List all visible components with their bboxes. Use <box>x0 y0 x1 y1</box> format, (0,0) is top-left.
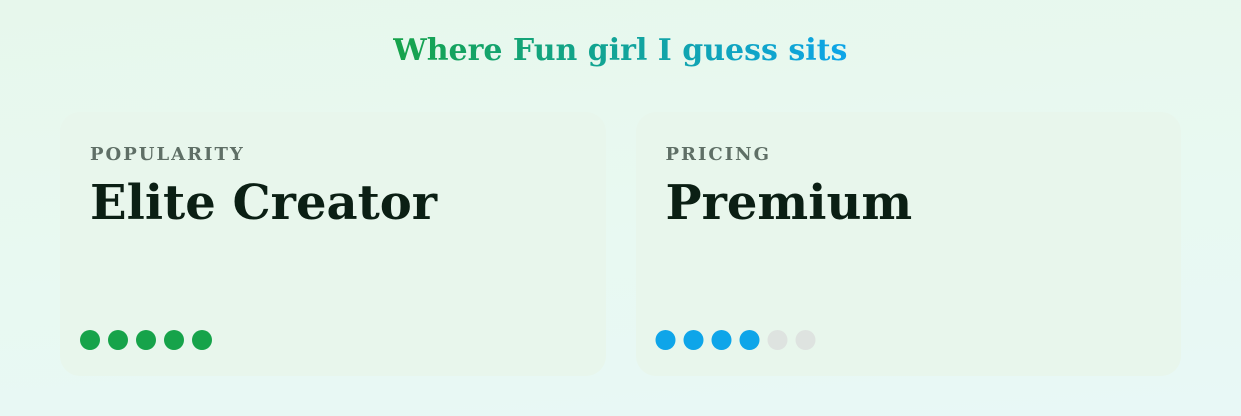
panel: pricing <box>636 112 1181 376</box>
title: Where Fun girl I guess sits <box>393 33 847 68</box>
pricing rating dots <box>656 330 816 350</box>
pricing value: Premium <box>666 175 912 231</box>
pricing label: PRICING <box>666 144 771 165</box>
popularity label: POPULARITY <box>90 144 245 165</box>
popularity value: Elite Creator <box>90 175 437 231</box>
panel: popularity <box>60 112 606 376</box>
popularity rating dots <box>80 330 212 350</box>
